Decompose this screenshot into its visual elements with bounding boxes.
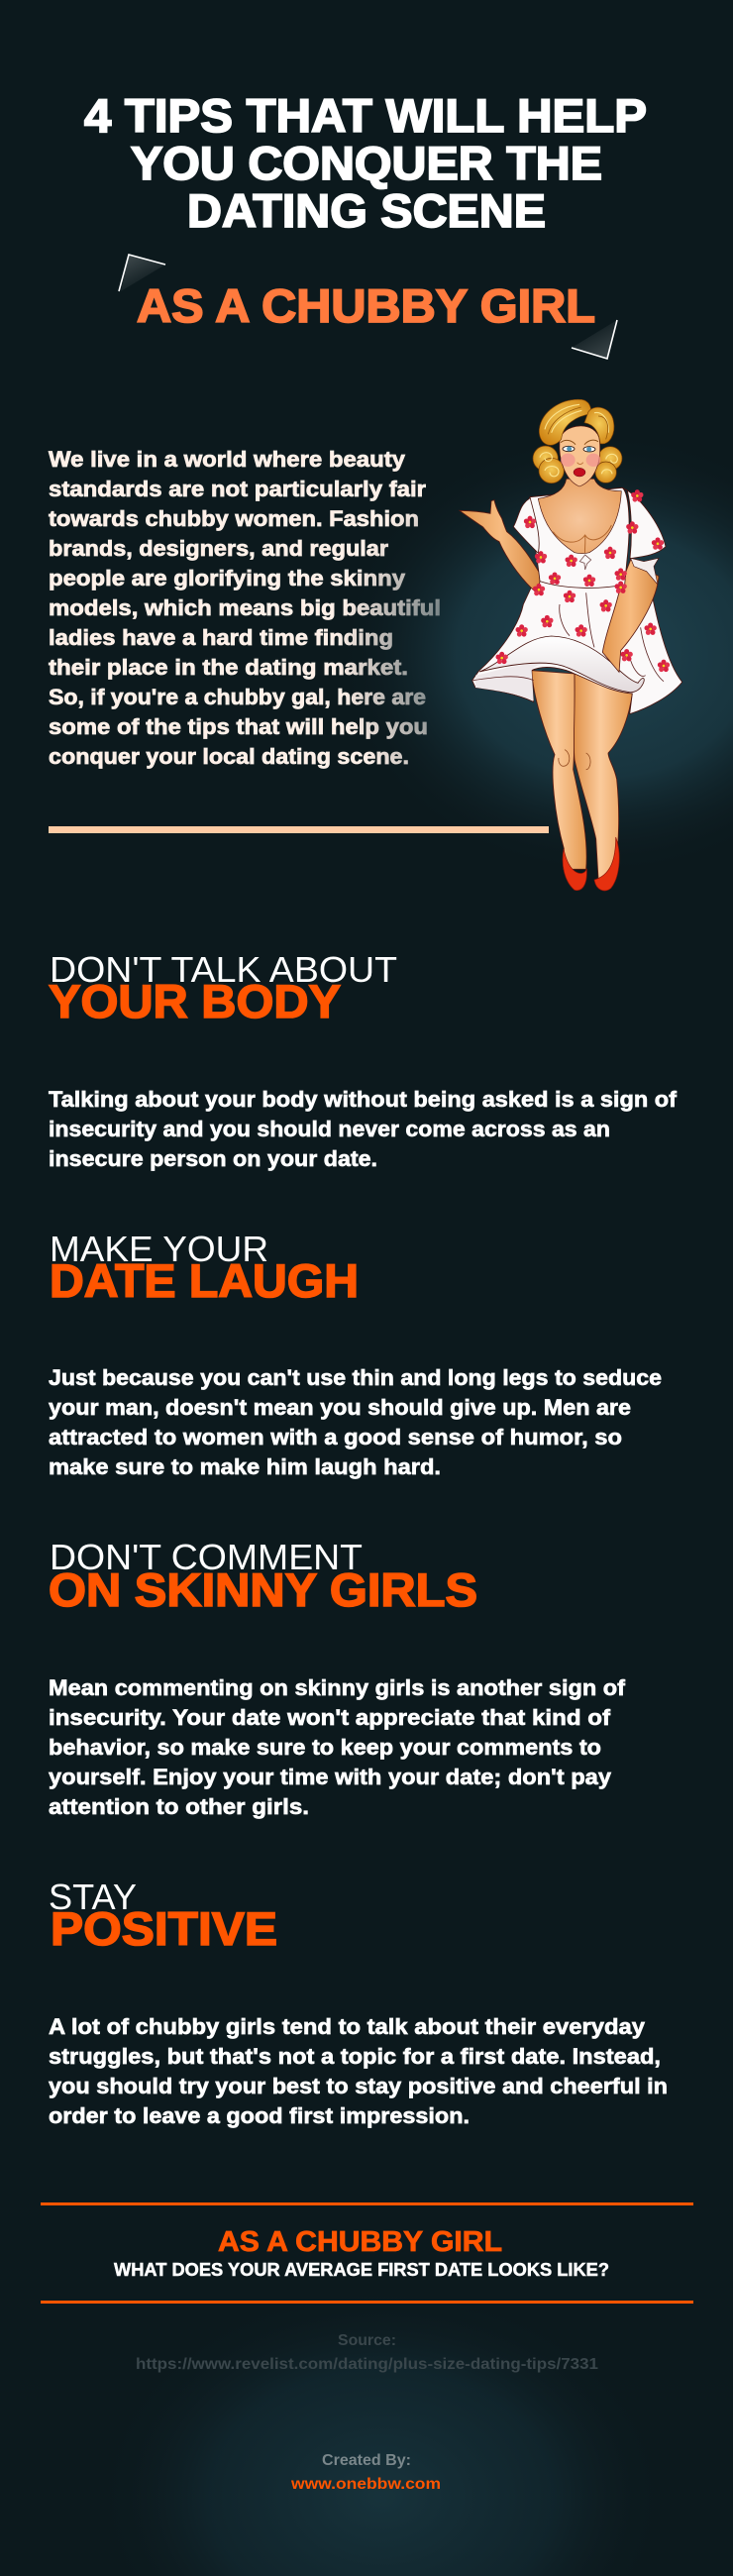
hair strands (540, 404, 617, 477)
section 3: heading: DON'T COMMENT (50, 1537, 363, 1577)
section 2: text: make sure to make him laugh hard. (49, 1454, 441, 1479)
section 1: heading (49, 949, 397, 1027)
lips (574, 468, 585, 477)
section 2: text: your man, doesn't mean you should give up. Men are (49, 1395, 631, 1420)
illustration: woman in floral dress (460, 399, 682, 891)
section 3: text (49, 1675, 626, 1819)
right arm (602, 560, 659, 672)
footer glow (94, 2284, 669, 2576)
section 1: text: insecure person on your date. (49, 1146, 377, 1171)
section 2: text (49, 1365, 662, 1479)
footer callout: WHAT DOES YOUR AVERAGE FIRST DATE LOOKS LIKE? (114, 2260, 609, 2280)
neck bow (579, 555, 591, 570)
section 1: text: Talking about your body without being asked is a sign of (49, 1087, 678, 1112)
footer callout (41, 2202, 693, 2304)
section 4: text: you should try your best to stay positive and cheerful in (49, 2074, 668, 2098)
section 3: text: behavior, so make sure to keep your comments to (49, 1735, 601, 1760)
intro text block: standards are not particularly fair (49, 477, 426, 501)
skirt hem underside (475, 663, 548, 700)
section 4: heading: STAY (49, 1877, 137, 1917)
face (560, 426, 600, 486)
skirt (472, 580, 682, 714)
hair curls and back (533, 446, 622, 483)
neck and chest (538, 479, 621, 554)
teal glow behind illustration (337, 431, 733, 877)
section 4: text (49, 2014, 668, 2128)
source: Source: (338, 2332, 396, 2349)
intro text block: towards chubby women. Fashion (49, 506, 419, 531)
intro text block: models, which means big beautiful (49, 595, 441, 620)
subtitle: AS A CHUBBY GIRL (137, 279, 595, 332)
title: YOU CONQUER THE (131, 137, 602, 189)
section 4: text: order to leave a good first impression. (49, 2103, 470, 2128)
section 1: heading: DON'T TALK ABOUT (50, 949, 397, 990)
section 3: heading (49, 1537, 477, 1616)
section 4: text: struggles, but that's not a topic for a first date. Instead, (49, 2044, 661, 2069)
nose (577, 463, 583, 464)
section 3: heading: ON SKINNY GIRLS (49, 1563, 477, 1616)
intro text block: We live in a world where beauty (49, 447, 406, 472)
lower body (472, 560, 682, 891)
title: 4 TIPS THAT WILL HELP (84, 89, 647, 142)
cleavage shading (553, 525, 611, 553)
intro text block: ladies have a hard time finding (49, 625, 393, 650)
section 1: heading: YOUR BODY (49, 975, 341, 1027)
section 4: heading: POSITIVE (51, 1902, 277, 1955)
section 2: heading: MAKE YOUR (50, 1229, 268, 1269)
left arm and pointing hand (460, 500, 542, 592)
section 3: text: Mean commenting on skinny girls is another sign of (49, 1675, 626, 1700)
knees (559, 750, 590, 770)
intro text block (49, 447, 441, 769)
credits: www.onebbw.com (290, 2476, 441, 2493)
credits (290, 2452, 441, 2493)
eyebrows (561, 440, 598, 445)
intro text block: some of the tips that will help you (49, 714, 428, 739)
section 2: text: attracted to women with a good sense of humor, so (49, 1425, 622, 1449)
intro text block: people are glorifying the skinny (49, 566, 406, 590)
sleeve: right (622, 487, 666, 559)
sleeve: left (513, 497, 539, 553)
eyes (563, 446, 595, 452)
bodice (530, 487, 629, 588)
skirt front fold (479, 636, 644, 693)
section 2: text: Just because you can't use thin and long legs to seduce (49, 1365, 662, 1390)
source (136, 2332, 598, 2373)
upper body (460, 399, 666, 592)
section 3: text: insecurity. Your date won't appreciate that kind of (49, 1705, 611, 1730)
intro text block: So, if you're a chubby gal, here are (49, 685, 426, 709)
corner bracket: top left (119, 255, 165, 291)
sleeve tie (631, 558, 659, 585)
skirt lines (472, 592, 664, 682)
intro text block: their place in the dating market. (49, 655, 408, 680)
intro text block: brands, designers, and regular (49, 536, 388, 561)
credits: Created By: (322, 2452, 411, 2469)
intro text block: conquer your local dating scene. (49, 744, 409, 769)
shoes (563, 837, 619, 891)
title: DATING SCENE (187, 184, 546, 237)
legs (532, 671, 632, 879)
cheeks (561, 454, 600, 467)
section 2: heading: DATE LAUGH (50, 1254, 359, 1307)
section 2: heading (50, 1229, 359, 1307)
hair dark strands (548, 407, 608, 439)
source: https://www.revelist.com/dating/plus-size-dating-tips/7331 (136, 2356, 598, 2373)
divider bar (49, 826, 549, 833)
section 3: text: attention to other girls. (49, 1794, 309, 1819)
dress flowers (495, 489, 670, 672)
corner bracket: bottom right (572, 320, 617, 359)
section 1: text (49, 1087, 678, 1171)
hair top lobes (539, 399, 614, 445)
footer callout: AS A CHUBBY GIRL (218, 2226, 502, 2258)
section 4: heading (49, 1877, 277, 1955)
section 3: text: yourself. Enjoy your time with your date; don't pay (49, 1765, 612, 1789)
section 1: text: insecurity and you should never come across as an (49, 1117, 610, 1141)
section 4: text: A lot of chubby girls tend to talk about their everyday (49, 2014, 646, 2039)
title (84, 89, 647, 237)
